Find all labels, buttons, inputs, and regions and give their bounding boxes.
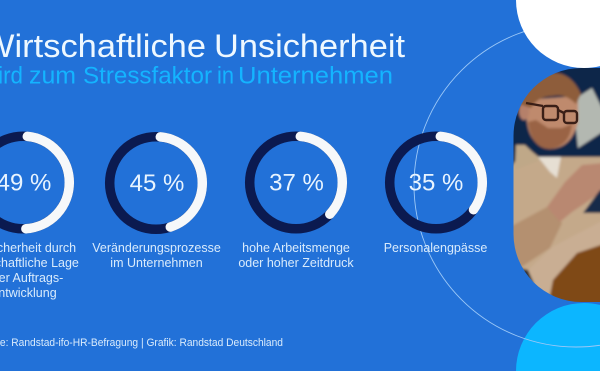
donut: 37 % — [250, 136, 342, 229]
donut: 49 % — [0, 136, 69, 229]
title — [0, 28, 405, 90]
title: in — [217, 62, 234, 90]
photo: man with glasses using a phone — [508, 64, 600, 306]
label: 45 %: im Unternehmen — [110, 256, 203, 270]
label: 35 %: Personalengpässe — [384, 241, 487, 255]
label: 37 % — [238, 241, 354, 270]
label: 49 % — [0, 241, 79, 300]
label: 45 % — [92, 241, 221, 270]
label: 37 %: hohe Arbeitsmenge — [242, 241, 350, 255]
donut: 35 % — [390, 136, 482, 229]
decorative white circle — [516, 0, 600, 68]
donut: 35 %: 35 % — [409, 170, 463, 196]
label: 37 %: oder hoher Zeitdruck — [238, 256, 354, 270]
title: Unternehmen — [238, 62, 393, 90]
title: Stressfaktor — [83, 62, 212, 90]
donut: 37 %: 37 % — [269, 170, 324, 196]
title: zum — [29, 62, 76, 90]
label: 45 %: Veränderungsprozesse — [92, 241, 221, 255]
title: Unsicherheit — [214, 28, 405, 64]
decorative cyan circle — [516, 303, 600, 371]
decorative thin arc — [414, 23, 600, 347]
donut: 45 %: 45 % — [130, 170, 184, 197]
donut: 45 % — [110, 137, 202, 229]
